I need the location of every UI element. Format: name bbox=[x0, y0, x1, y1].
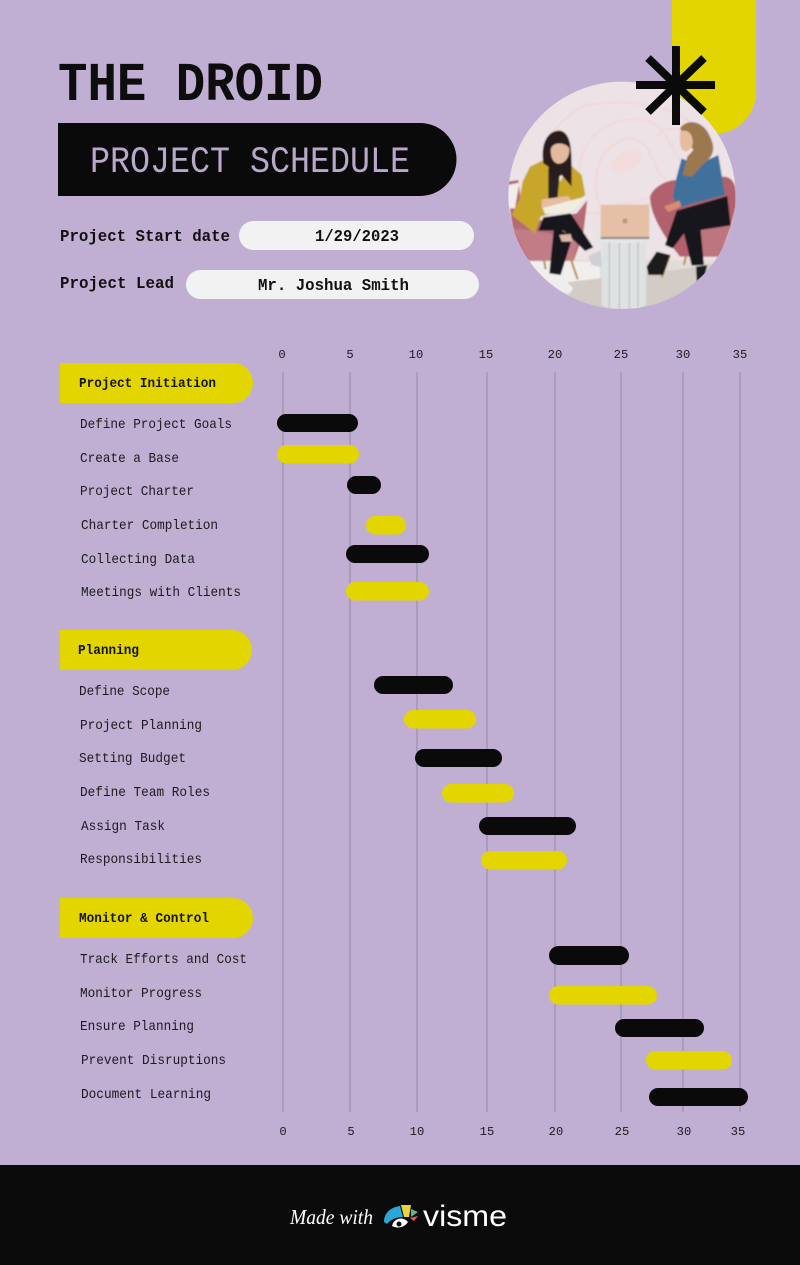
bottom axis: 0 bbox=[279, 1125, 287, 1139]
bottom axis: 30 bbox=[677, 1125, 691, 1139]
section: project initiation bbox=[60, 363, 253, 403]
bottom axis: 25 bbox=[615, 1125, 629, 1139]
tasks: monitor and control: Track Efforts and Cost bbox=[80, 953, 247, 968]
tasks: project initiation bbox=[80, 418, 241, 601]
top axis: 35 bbox=[733, 348, 747, 362]
top axis: 0 bbox=[278, 348, 286, 362]
top axis: 5 bbox=[346, 348, 354, 362]
bars: monitor and control bbox=[549, 946, 748, 1106]
top axis: 20 bbox=[548, 348, 562, 362]
left woman hair and face bbox=[543, 131, 572, 187]
project start date field bbox=[60, 221, 474, 250]
yellow corner shape bbox=[672, 0, 756, 134]
footer bbox=[0, 1165, 800, 1265]
left woman arm and notebook bbox=[542, 196, 573, 208]
project lead field: Mr. Joshua Smith bbox=[258, 277, 409, 296]
tasks: planning: Assign Task bbox=[81, 820, 165, 835]
left woman shoes bbox=[550, 282, 574, 294]
right woman hair and face bbox=[680, 122, 713, 177]
tasks: project initiation: Charter Completion bbox=[81, 519, 218, 534]
top axis bbox=[278, 348, 747, 362]
subtitle banner bbox=[58, 123, 456, 196]
right woman boots bbox=[647, 252, 670, 275]
subtitle banner: PROJECT SCHEDULE bbox=[90, 142, 410, 184]
bottom axis: 10 bbox=[410, 1125, 424, 1139]
top axis: 30 bbox=[676, 348, 690, 362]
tasks: project initiation: Define Project Goals bbox=[80, 418, 232, 433]
left chair bbox=[508, 180, 587, 261]
tasks: monitor and control: Monitor Progress bbox=[80, 987, 202, 1002]
project start date field: Project Start date bbox=[60, 228, 230, 247]
section: planning: Planning bbox=[78, 644, 139, 659]
right chair bbox=[650, 177, 736, 257]
asterisk icon bbox=[636, 46, 715, 125]
right woman denim shirt bbox=[673, 155, 725, 208]
tasks: planning: Responsibilities bbox=[80, 853, 202, 868]
top axis: 25 bbox=[614, 348, 628, 362]
visme wordmark: visme bbox=[423, 1200, 507, 1233]
bottom axis bbox=[279, 1125, 745, 1139]
tasks: monitor and control: Prevent Disruptions bbox=[81, 1054, 226, 1069]
bottom axis: 20 bbox=[549, 1125, 563, 1139]
laptop bbox=[601, 205, 649, 238]
bottom axis: 5 bbox=[347, 1125, 355, 1139]
bars: project initiation bbox=[277, 414, 429, 600]
top axis: 15 bbox=[479, 348, 493, 362]
tasks: project initiation: Project Charter bbox=[80, 485, 194, 500]
bottom axis: 15 bbox=[480, 1125, 494, 1139]
tasks: monitor and control bbox=[80, 953, 247, 1103]
bottom axis: 35 bbox=[731, 1125, 745, 1139]
made with credit: Made with bbox=[289, 1205, 373, 1229]
title: THE DROID bbox=[58, 54, 323, 117]
right woman hand bbox=[664, 201, 681, 212]
bars: planning bbox=[374, 676, 576, 870]
tasks: planning bbox=[79, 685, 210, 868]
left woman legs bbox=[538, 213, 593, 251]
project start date field: 1/29/2023 bbox=[315, 228, 399, 247]
tasks: monitor and control: Document Learning bbox=[81, 1088, 211, 1103]
table column bbox=[602, 240, 646, 309]
section: monitor and control: Monitor & Control bbox=[79, 912, 209, 927]
right woman trousers bbox=[665, 196, 731, 266]
tasks: project initiation: Create a Base bbox=[80, 452, 179, 467]
tasks: planning: Project Planning bbox=[80, 719, 202, 734]
project lead field: Project Lead bbox=[60, 275, 174, 294]
section: monitor and control bbox=[60, 898, 253, 938]
tasks: planning: Define Team Roles bbox=[80, 786, 210, 801]
tasks: planning: Define Scope bbox=[79, 685, 170, 700]
section: planning bbox=[60, 630, 252, 670]
project lead field bbox=[60, 270, 479, 299]
tasks: project initiation: Collecting Data bbox=[81, 553, 195, 568]
icon: visme logo bbox=[384, 1205, 418, 1228]
floor bbox=[564, 260, 715, 296]
tasks: monitor and control: Ensure Planning bbox=[80, 1020, 194, 1035]
tasks: project initiation: Meetings with Clients bbox=[81, 586, 241, 601]
top axis: 10 bbox=[409, 348, 423, 362]
photo: two women meeting bbox=[507, 80, 740, 313]
left woman jacket bbox=[512, 160, 585, 233]
tasks: planning: Setting Budget bbox=[79, 752, 186, 767]
section: project initiation: Project Initiation bbox=[79, 377, 216, 392]
